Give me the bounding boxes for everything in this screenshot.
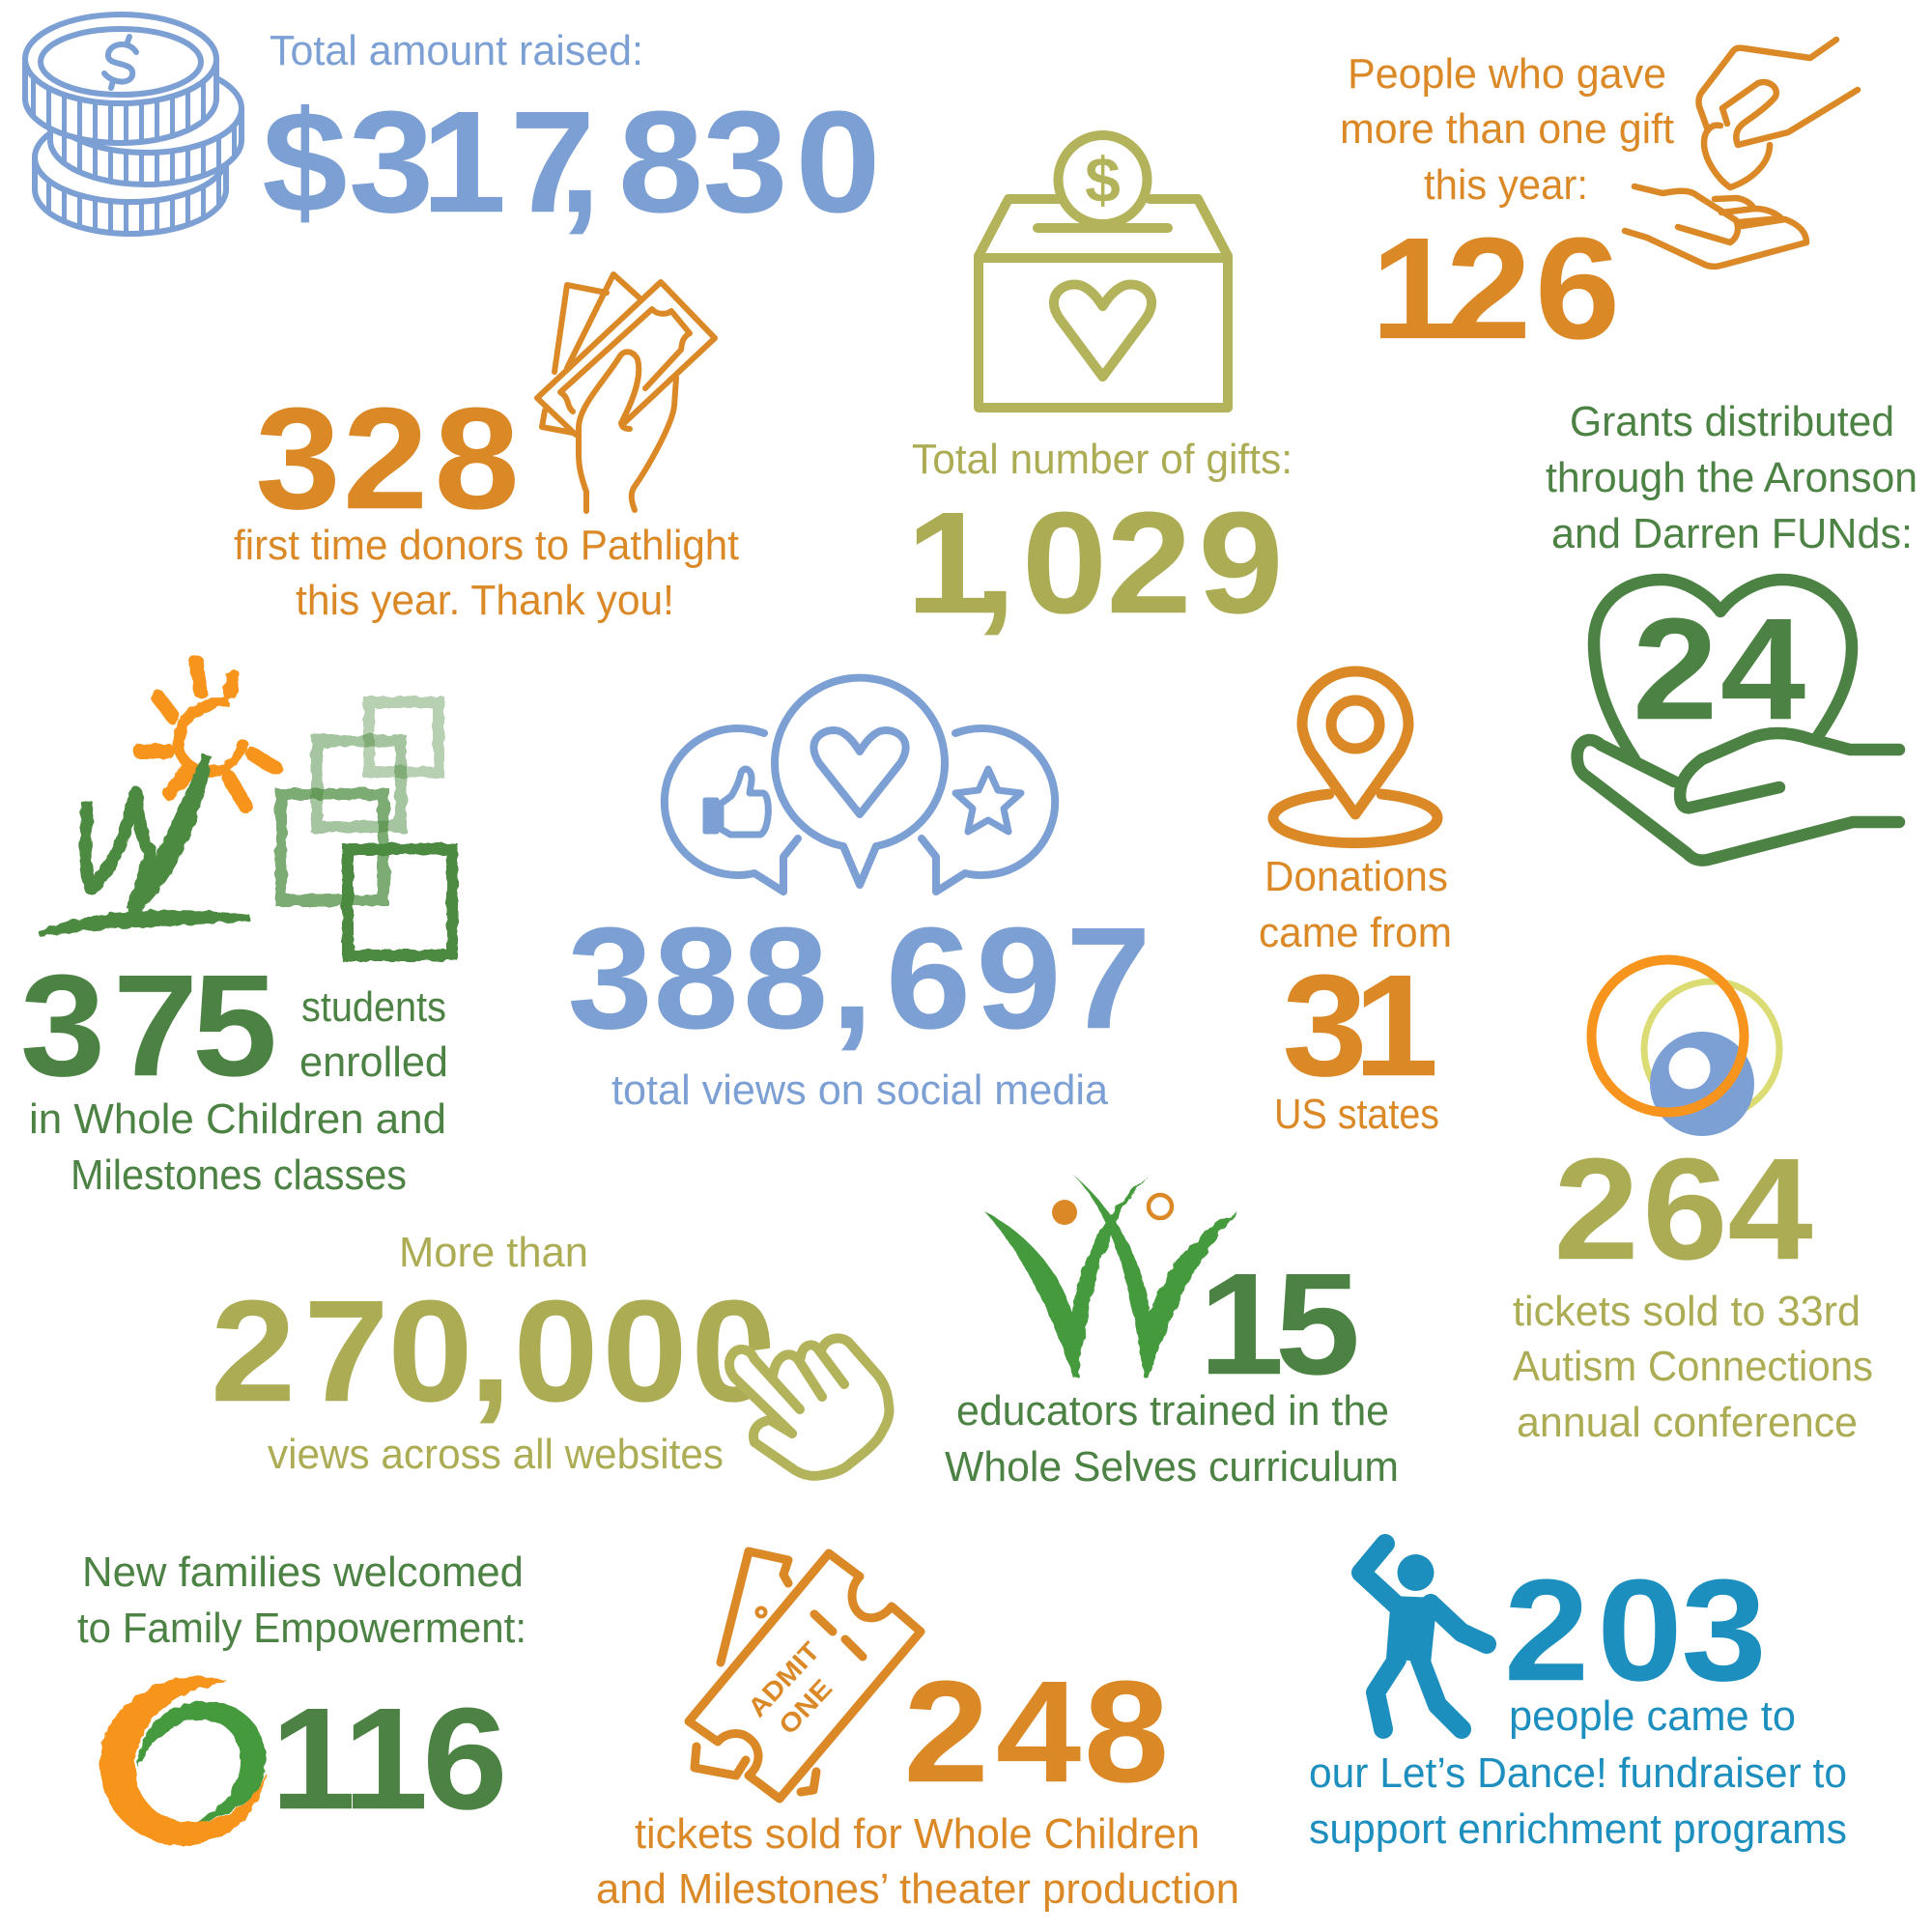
icon: swirl ring logo xyxy=(99,1676,267,1846)
icon: orange dot xyxy=(1052,1200,1077,1225)
label: repeat donors xyxy=(1340,50,1674,209)
caption: donations came from: came from xyxy=(1259,909,1452,956)
caption: first time donors xyxy=(234,522,739,624)
number: new families: 116 xyxy=(270,1677,508,1839)
label: grants distributed: through the Aronson xyxy=(1546,454,1918,501)
icon: painted flower and sun xyxy=(40,662,275,934)
label: repeat donors: more than one gift xyxy=(1340,105,1674,153)
caption: theater tickets: tickets sold for Whole Children xyxy=(635,1810,1200,1858)
panel: total amount raised xyxy=(25,14,881,242)
caption: conference tickets xyxy=(1513,1288,1873,1446)
number: educators: 15 xyxy=(1199,1242,1360,1405)
number: total gifts: 1,029 xyxy=(906,481,1284,643)
caption: first time donors: this year. Thank you! xyxy=(296,577,674,624)
icon: stack of coins xyxy=(25,14,242,234)
icon: hand dropping heart into hand xyxy=(1625,40,1858,267)
caption: students: in Whole Children and xyxy=(29,1095,446,1143)
label: admit one xyxy=(742,1636,838,1740)
label: admit one: ONE xyxy=(773,1674,838,1740)
icon: map pin xyxy=(1273,671,1437,843)
number: social views: 388,697 xyxy=(567,896,1151,1059)
panel: new families xyxy=(77,1548,526,1846)
caption: conference tickets: tickets sold to 33rd xyxy=(1513,1288,1861,1335)
caption: students: Milestones classes xyxy=(71,1151,407,1199)
icon: dollar sign: $ xyxy=(1085,144,1121,215)
number: dance attendees: 203 xyxy=(1504,1548,1767,1711)
label: more than: More than xyxy=(399,1229,588,1276)
label: total number of gifts: Total number of gifts: xyxy=(912,436,1293,483)
caption: dance attendees: people came to xyxy=(1509,1692,1796,1740)
icon: admit one ticket xyxy=(689,1551,921,1799)
number: grants: 24 xyxy=(1633,587,1805,750)
number: first time donors: 328 xyxy=(255,377,520,539)
icon: orange ring xyxy=(1149,1195,1172,1218)
caption: educators: educators trained in the xyxy=(956,1387,1389,1435)
label: repeat donors: this year: xyxy=(1424,161,1588,209)
number: conference tickets: 264 xyxy=(1553,1127,1813,1290)
label: grants distributed: Grants distributed xyxy=(1570,398,1894,445)
panel: repeat donors xyxy=(1340,40,1858,369)
label: new families xyxy=(77,1548,526,1652)
number: repeat donors: 126 xyxy=(1371,207,1620,369)
caption: conference tickets: Autism Connections xyxy=(1513,1343,1873,1390)
panel: educators trained xyxy=(945,1175,1399,1491)
caption: dance attendees: our Let’s Dance! fundraiser to xyxy=(1309,1749,1847,1797)
caption: website views: views across all websites xyxy=(268,1431,724,1478)
number: states: 31 xyxy=(1282,944,1438,1106)
label: new families: New families welcomed xyxy=(82,1548,524,1596)
panel: website views xyxy=(211,1229,890,1478)
caption: theater tickets xyxy=(596,1810,1239,1913)
icon: donation box with coin and heart xyxy=(979,135,1228,408)
panel: conference tickets xyxy=(1513,960,1873,1446)
label: grants distributed xyxy=(1546,398,1918,557)
icon: overlapping circles logo xyxy=(1592,960,1779,1136)
caption: students: enrolled xyxy=(299,1038,448,1086)
number: students: 375 xyxy=(20,944,277,1106)
icon: social speech bubbles xyxy=(665,678,1055,892)
caption: educators xyxy=(945,1387,1399,1491)
panel: social media views xyxy=(567,678,1151,1114)
caption: theater tickets: and Milestones’ theater production xyxy=(596,1865,1239,1913)
caption: students xyxy=(29,983,448,1199)
icon: heart in open hand xyxy=(1577,580,1899,861)
caption: educators: Whole Selves curriculum xyxy=(945,1443,1399,1491)
label: repeat donors: People who gave xyxy=(1348,50,1666,98)
caption: dance attendees: support enrichment programs xyxy=(1309,1805,1847,1853)
panel: let's dance fundraiser xyxy=(1309,1544,1847,1853)
caption: first time donors: first time donors to Pathlight xyxy=(234,522,739,569)
label: admit one: ADMIT xyxy=(742,1636,826,1722)
number: website views: 270,000 xyxy=(211,1269,777,1432)
panel: donor states xyxy=(1259,671,1452,1138)
icon: hand holding bills xyxy=(537,274,715,511)
panel: theater tickets xyxy=(596,1551,1239,1913)
number: total raised: $317,830 xyxy=(262,80,881,242)
icon: green sprouts logo xyxy=(984,1175,1237,1378)
caption: US states: US states xyxy=(1274,1091,1439,1138)
caption: students: students xyxy=(301,983,446,1031)
panel: first time donors xyxy=(234,274,739,624)
icon: painted stacked squares xyxy=(281,702,452,955)
icon: pointing hand xyxy=(729,1338,890,1476)
number: theater tickets: 248 xyxy=(903,1650,1169,1812)
caption: dance attendees xyxy=(1309,1692,1847,1853)
caption: conference tickets: annual conference xyxy=(1517,1399,1858,1446)
caption: donations came from xyxy=(1259,853,1452,956)
label: new families: to Family Empowerment: xyxy=(77,1605,526,1652)
caption: social views: total views on social media xyxy=(611,1066,1109,1114)
panel: total number of gifts xyxy=(906,135,1293,643)
label: total amount raised: Total amount raised: xyxy=(270,27,643,74)
icon: dancing person xyxy=(1361,1544,1487,1729)
label: grants distributed: and Darren FUNds: xyxy=(1551,510,1913,557)
caption: donations came from: Donations xyxy=(1264,853,1448,900)
panel: grants distributed xyxy=(1546,398,1918,861)
panel: enrolled students xyxy=(20,662,452,1199)
